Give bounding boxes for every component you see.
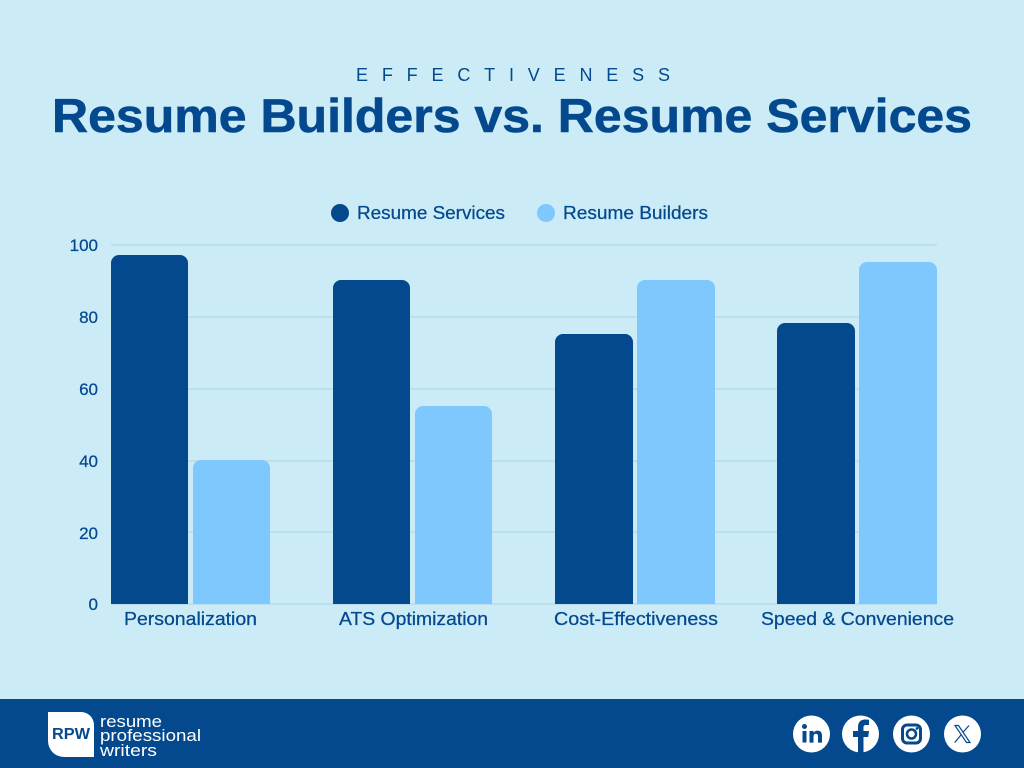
x axis labels: Personalization [124,609,257,629]
y axis labels: 100 [70,236,98,255]
y axis labels: 20 [79,524,98,543]
y axis labels: 80 [79,308,98,327]
y axis labels [70,236,98,614]
bars: ats optimization [333,280,492,604]
icon: facebook [842,716,879,752]
logo wordmark: professional [100,726,201,745]
bars: personalization [111,255,270,604]
x axis labels: Speed & Convenience [761,609,954,629]
x axis labels: ATS Optimization [339,609,488,629]
logo wordmark: writers [99,741,157,760]
logo wordmark [99,712,201,760]
y axis labels: 0 [89,595,98,614]
title: Resume Builders vs. Resume Services [52,89,972,142]
logo badge [48,712,94,757]
legend [331,203,708,223]
icon: linkedin [793,716,830,752]
bars: speed and convenience [777,262,937,604]
legend: resume services: Resume Services [357,203,505,223]
footer band [0,699,1024,768]
eyebrow heading: EFFECTIVENESS [356,65,670,85]
y axis labels: 60 [79,380,98,399]
legend: resume builders: Resume Builders [563,203,708,223]
x axis labels [124,609,954,629]
y axis labels: 40 [79,452,98,471]
logo badge: RPW [52,726,91,743]
icon: instagram [893,716,930,752]
icon: x [944,716,981,752]
bars: cost-effectiveness [555,280,715,604]
x axis labels: Cost-Effectiveness [554,609,718,629]
bar chart [70,236,954,629]
logo wordmark: resume [100,712,162,731]
